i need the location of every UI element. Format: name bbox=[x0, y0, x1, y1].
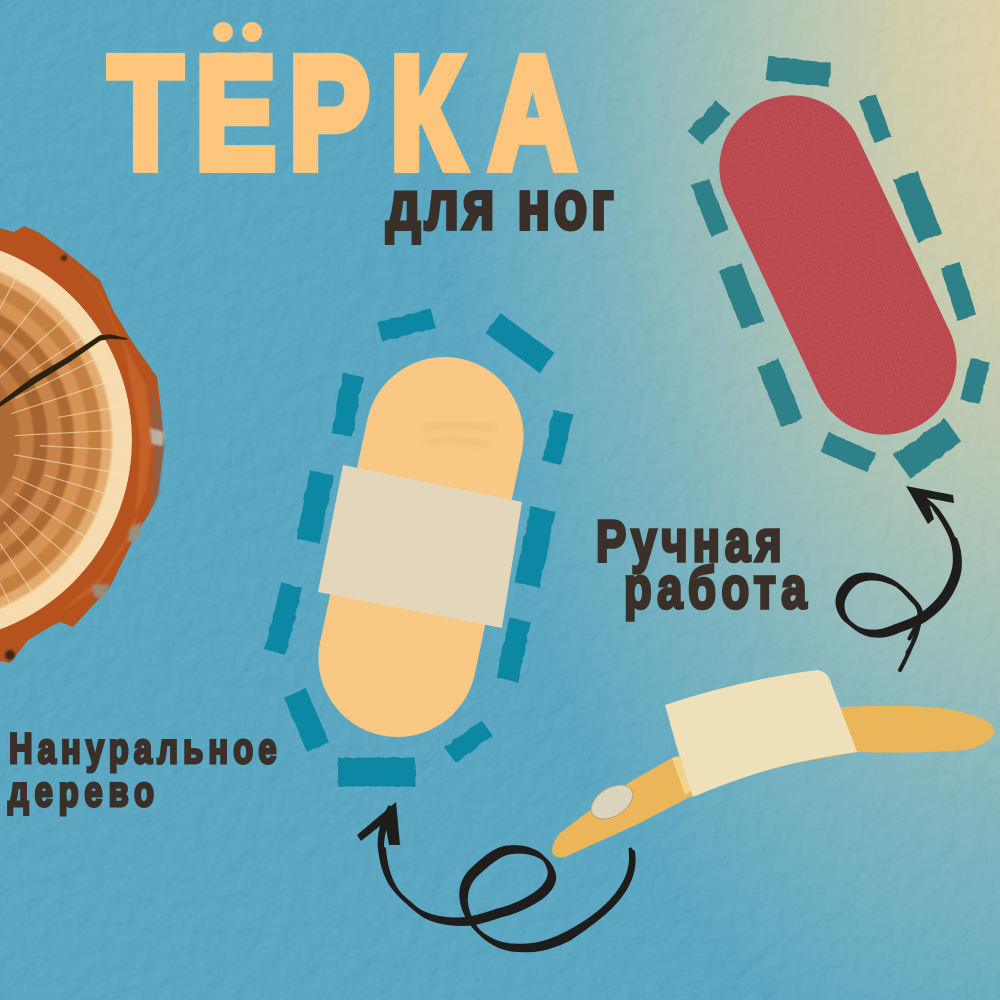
foot file, wooden face with strap bbox=[304, 342, 538, 752]
foot file, side view bbox=[552, 670, 994, 857]
sole bbox=[552, 706, 994, 857]
dashed outline around top of tool bbox=[275, 318, 563, 772]
strap bbox=[665, 670, 857, 797]
arrow to wooden face bbox=[357, 802, 634, 950]
text: handmade label: работа bbox=[624, 557, 807, 621]
text: natural wood label: Нануральное bbox=[9, 725, 277, 773]
foot file, abrasive red face bbox=[719, 95, 957, 435]
bark bbox=[0, 226, 164, 663]
elastic strap bbox=[318, 465, 522, 628]
subtitle: для ног bbox=[386, 167, 614, 245]
title: ТЁРКА bbox=[108, 24, 576, 203]
arrow to abrasive face bbox=[838, 486, 960, 670]
text: handmade label: Ручная bbox=[596, 510, 782, 574]
dashed outline around abrasive face bbox=[695, 68, 980, 467]
crack bbox=[0, 335, 127, 406]
wood slice illustration bbox=[0, 226, 164, 663]
text: handmade label bbox=[596, 510, 807, 621]
fold of strap bbox=[672, 756, 692, 795]
text: natural wood label: дерево bbox=[8, 768, 154, 816]
text: natural wood label bbox=[8, 725, 277, 816]
sapwood and heartwood rings bbox=[0, 238, 132, 642]
medallion bbox=[585, 778, 639, 826]
